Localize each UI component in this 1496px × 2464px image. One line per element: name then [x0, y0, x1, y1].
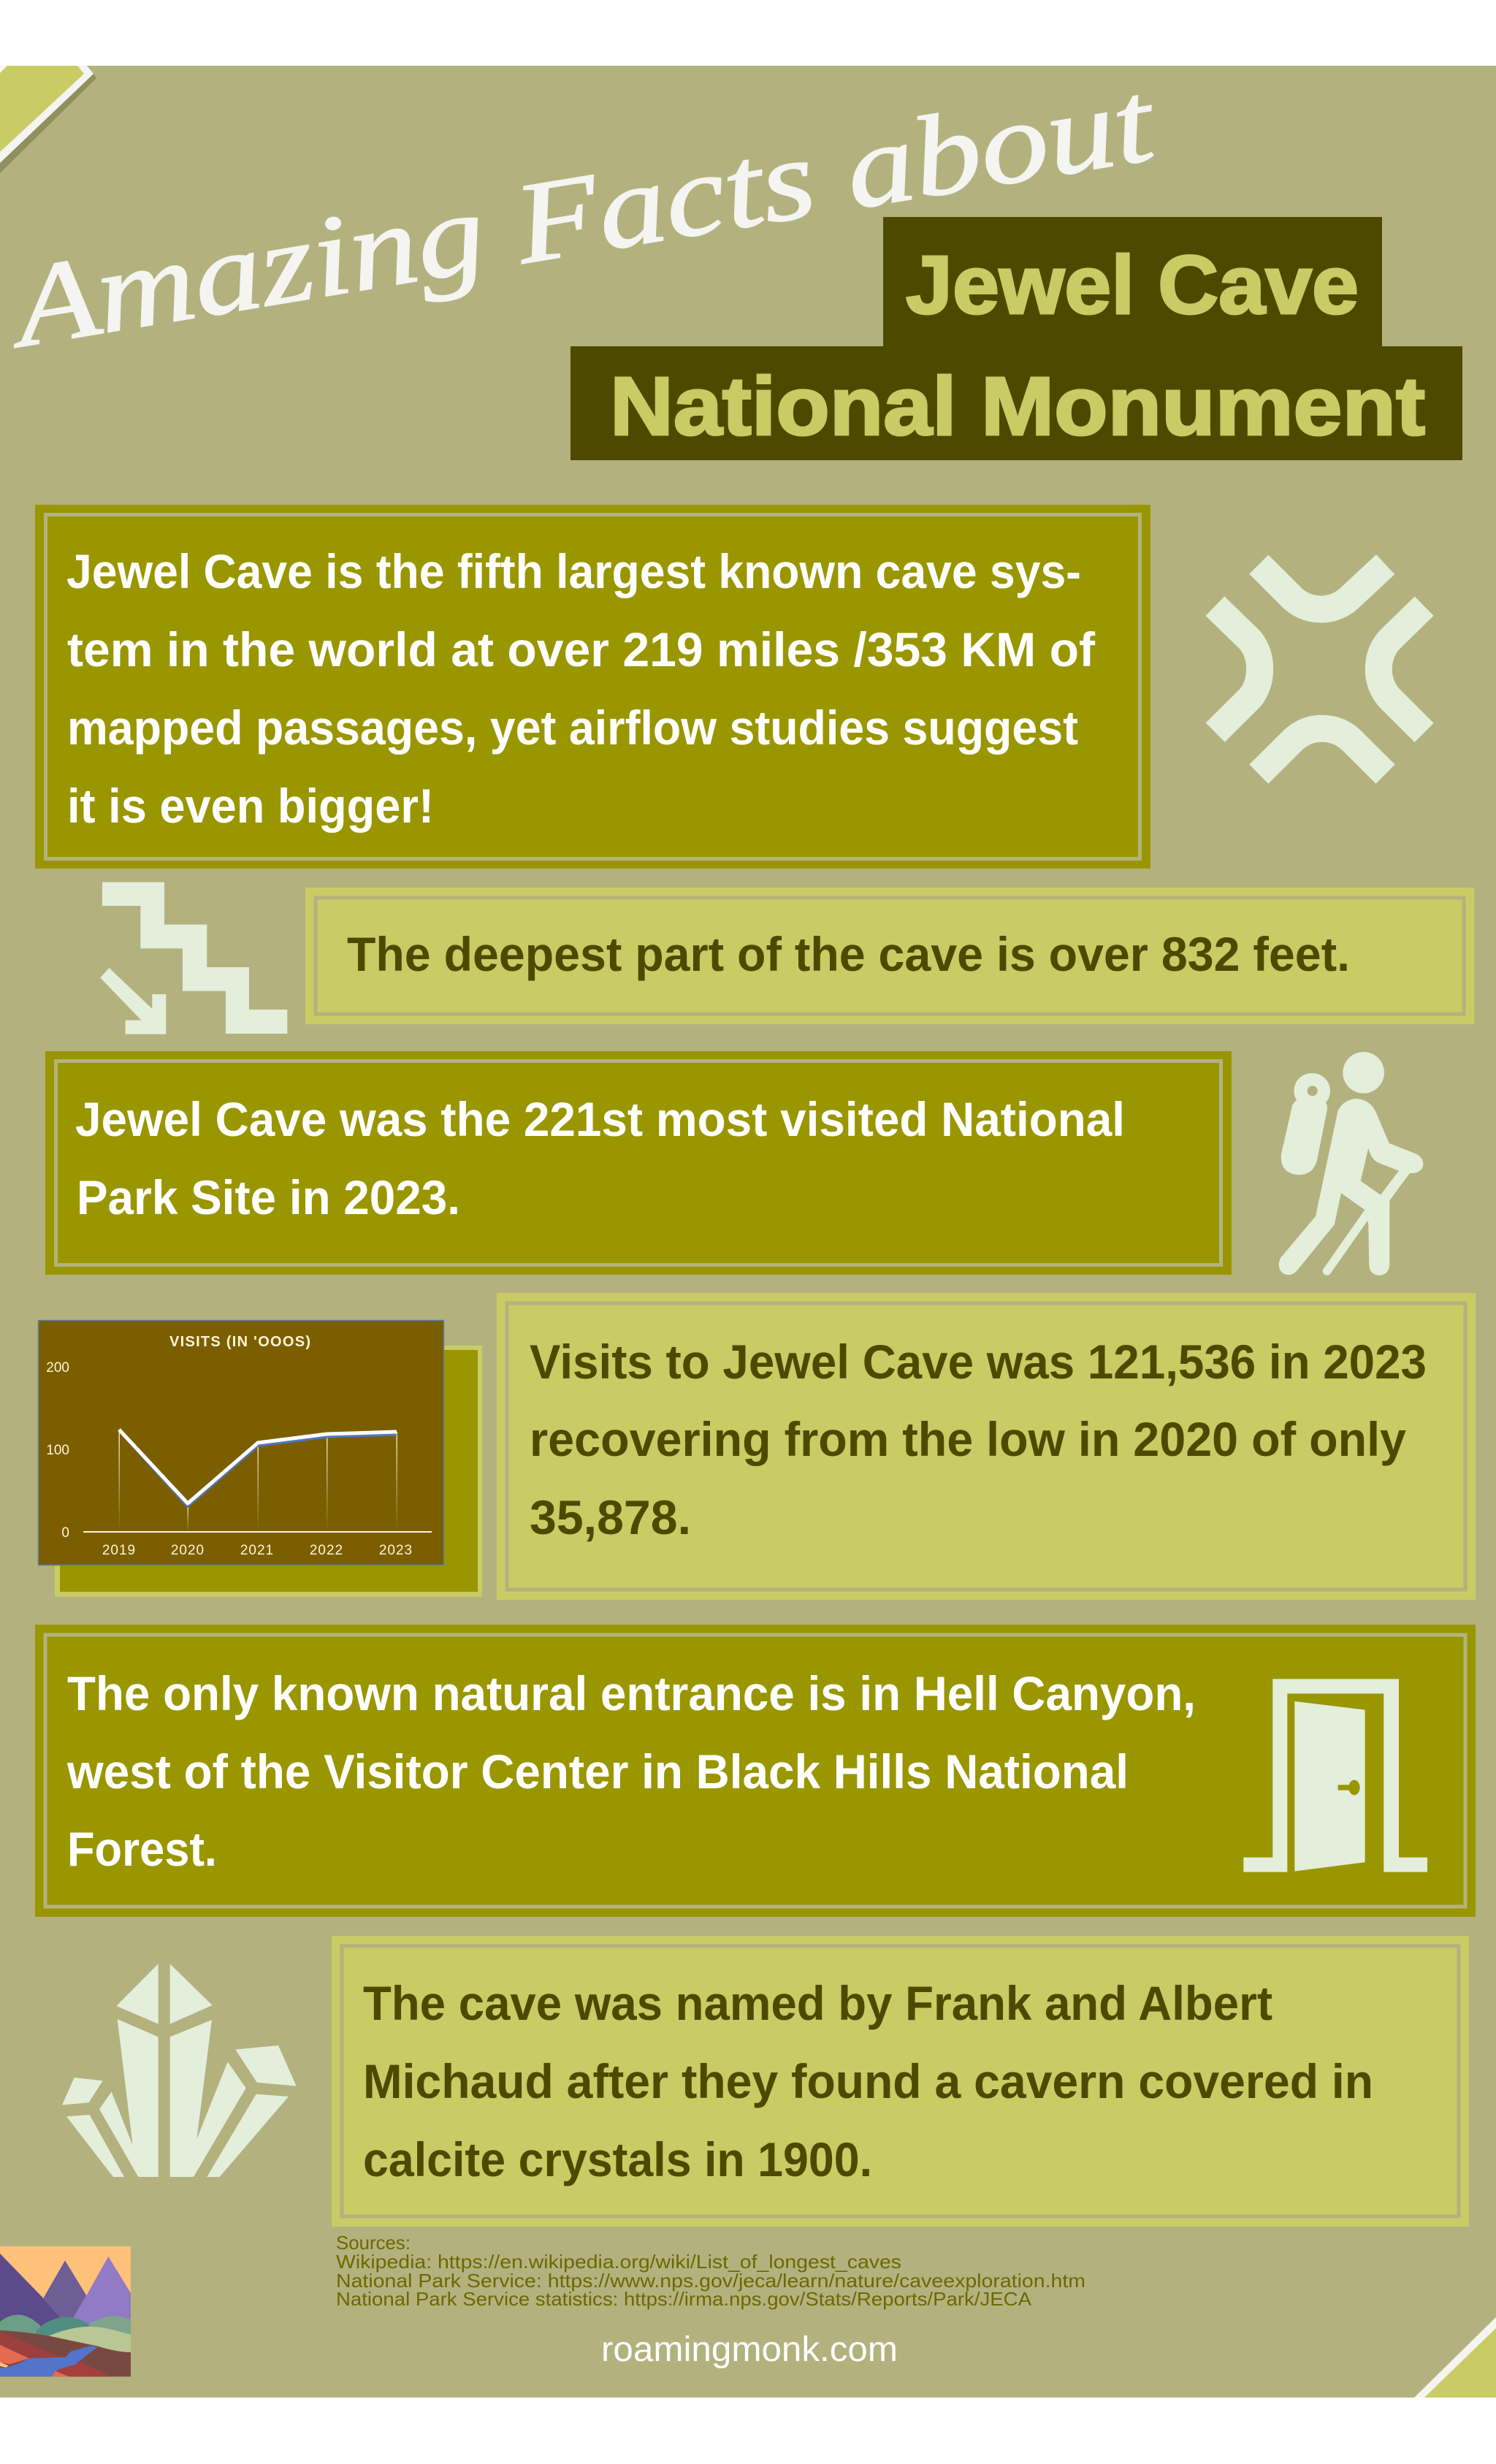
title: National Monument: National Monument: [610, 360, 1425, 452]
y axis labels: [46, 1360, 69, 1541]
title: Jewel Cave: Jewel Cave: [906, 239, 1359, 331]
panel: natural entrance: [35, 1625, 1476, 1917]
text: named by Michaud: [363, 1976, 1373, 2186]
panel: fifth largest cave: [35, 505, 1150, 869]
panel: deepest part: [305, 888, 1474, 1024]
text: fifth largest cave: it is even bigger!: [67, 779, 434, 833]
y axis labels: 0: [61, 1525, 69, 1541]
text: most visited: [75, 1092, 1125, 1224]
sources: National Park Service: https://www.nps.gov/jeca/learn/nature/caveexploration.htm: [336, 2270, 1085, 2292]
text: most visited: Jewel Cave was the 221st most visited National: [75, 1092, 1125, 1146]
x axis labels: [102, 1543, 413, 1558]
icon: anger mark: [1215, 565, 1424, 774]
chart backing panel: [55, 1346, 482, 1597]
text: named by Michaud: The cave was named by Frank and Albert: [363, 1976, 1272, 2030]
sources: Sources:: [336, 2232, 411, 2254]
logo: landscape: [0, 2246, 131, 2376]
title: script line: Amazing Facts about: [0, 57, 1164, 373]
website: roamingmonk.com: [601, 2330, 898, 2369]
x axis labels: 2023: [379, 1543, 413, 1558]
drop lines: [118, 1430, 397, 1532]
text: fifth largest cave: [66, 544, 1096, 833]
panel: most visited: [45, 1051, 1232, 1275]
text: visits: [530, 1335, 1427, 1544]
icon: crystals: [62, 1964, 297, 2177]
text: named by Michaud: calcite crystals in 1900.: [363, 2132, 872, 2186]
text: fifth largest cave: mapped passages, yet airflow studies suggest: [67, 701, 1078, 755]
text: named by Michaud: Michaud after they found a cavern covered in: [363, 2054, 1373, 2108]
y axis labels: 200: [46, 1360, 69, 1376]
icon: hiker: [1279, 1052, 1423, 1275]
text: visits: recovering from the low in 2020 of only: [530, 1412, 1406, 1466]
text: natural entrance: The only known natural entrance is in Hell Canyon,: [67, 1666, 1196, 1720]
corner ribbon: bottom right: [1414, 2317, 1496, 2398]
y axis labels: 100: [46, 1443, 69, 1458]
panel: named by Michaud: [332, 1936, 1469, 2227]
text: natural entrance: west of the Visitor Center in Black Hills National: [66, 1744, 1129, 1799]
data line: [119, 1430, 397, 1506]
sources: Wikipedia: https://en.wikipedia.org/wiki/List_of_longest_caves: [336, 2251, 901, 2273]
title: National Monument: [570, 346, 1462, 460]
title: Jewel Cave: [883, 217, 1382, 348]
text: deepest part: The deepest part of the cave is over 832 feet.: [347, 927, 1350, 981]
panel: visits text: [497, 1293, 1476, 1600]
chart title: VISITS (IN 'OOOS): [169, 1334, 310, 1350]
sources: [336, 2232, 1085, 2310]
x axis labels: 2020: [171, 1543, 205, 1558]
text: fifth largest cave: tem in the world at over 219 miles /353 KM of: [67, 622, 1096, 676]
corner ribbon: top left: [0, 66, 96, 173]
icon: descending stairs: [100, 882, 287, 1034]
text: fifth largest cave: Jewel Cave is the fifth largest known cave sys-: [66, 544, 1081, 598]
x axis labels: 2022: [310, 1543, 343, 1558]
text: natural entrance: Forest.: [67, 1822, 217, 1876]
sources: National Park Service statistics: https://irma.nps.gov/Stats/Reports/Park/JECA: [336, 2288, 1032, 2310]
text: visits: 35,878.: [530, 1490, 691, 1544]
x axis labels: 2021: [240, 1543, 274, 1558]
text: visits: Visits to Jewel Cave was 121,536 in 2023: [530, 1335, 1427, 1389]
text: most visited: Park Site in 2023.: [77, 1170, 460, 1224]
x axis labels: 2019: [102, 1543, 136, 1558]
line chart: visits: [38, 1321, 444, 1565]
text: natural entrance: [66, 1666, 1196, 1876]
axis line: [83, 1531, 432, 1533]
icon: open door: [1243, 1679, 1427, 1872]
